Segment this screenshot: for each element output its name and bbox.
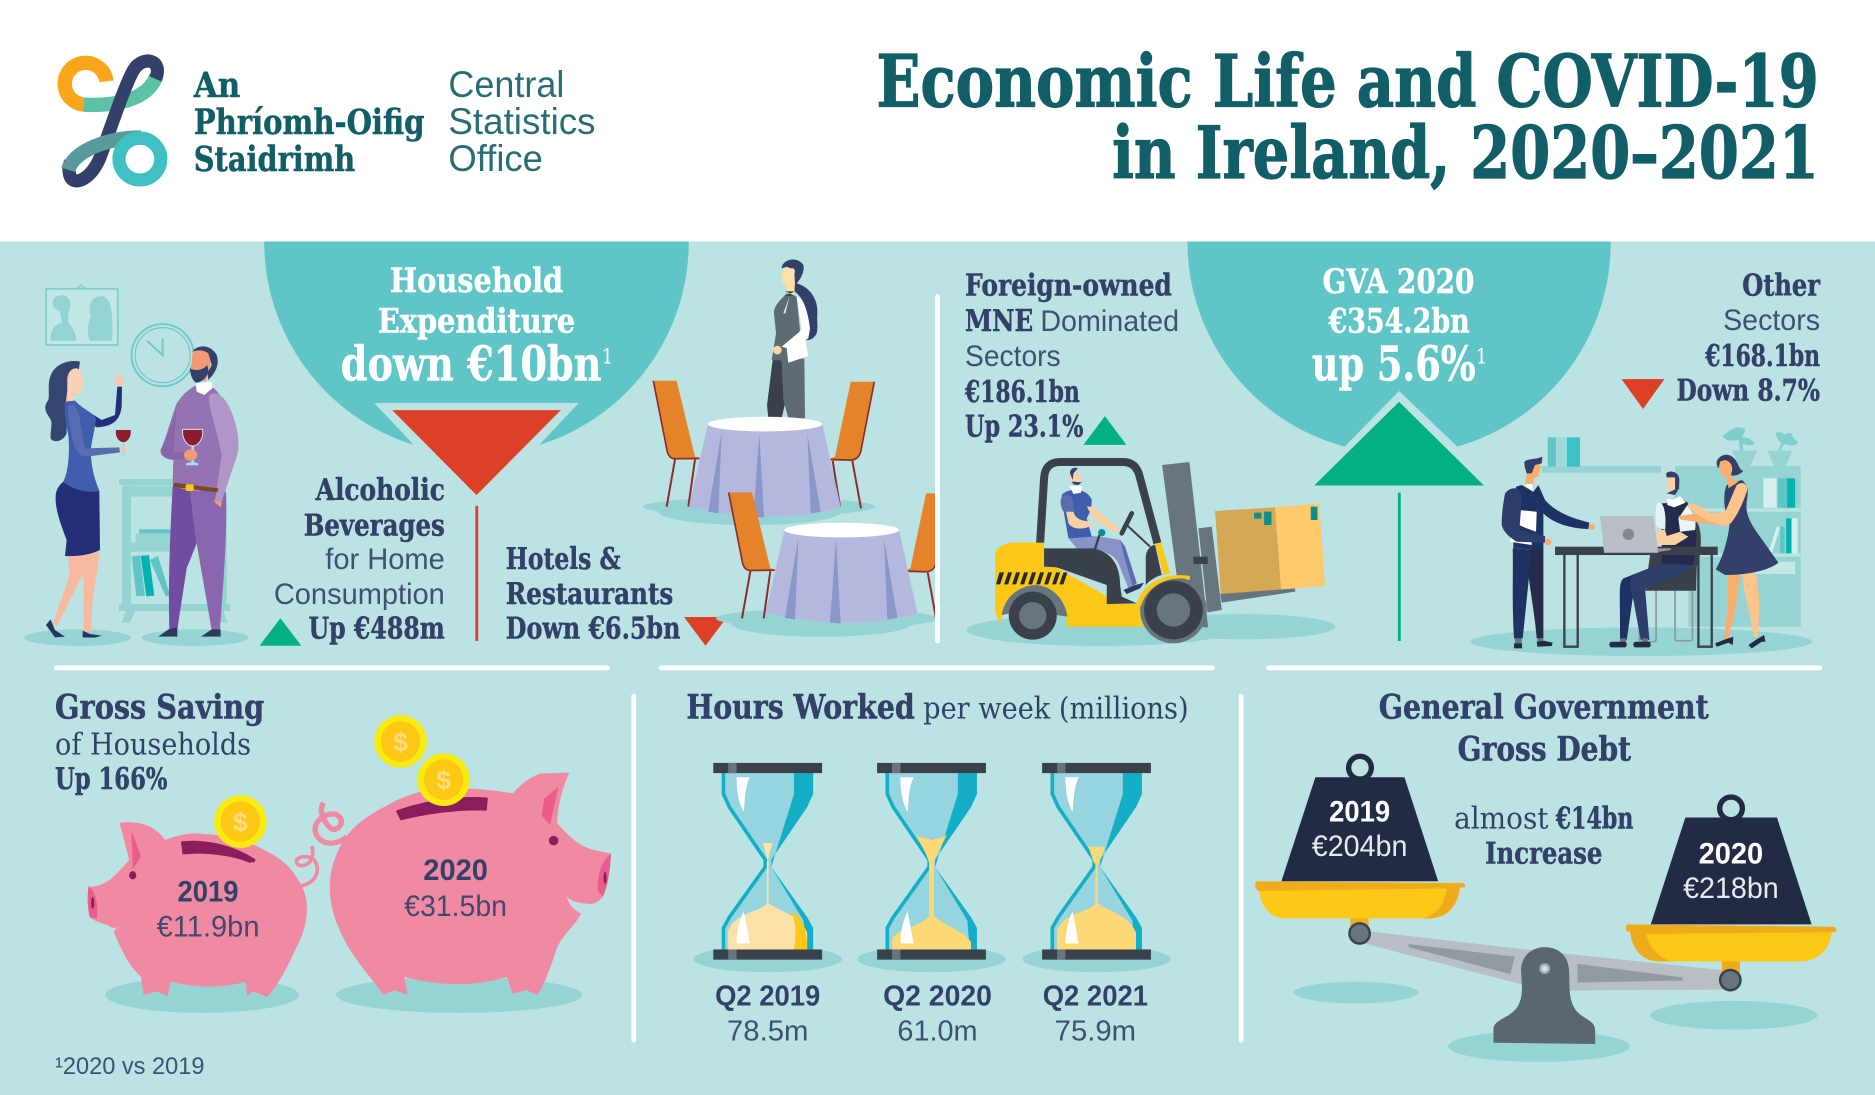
page background band <box>0 242 1875 1095</box>
hourglass Q2 2019 <box>694 763 842 972</box>
increase callout <box>1454 802 1634 871</box>
headline: 1 <box>601 345 613 369</box>
hotels and restaurants text: Restaurants <box>506 577 673 612</box>
headline: Household <box>390 261 563 300</box>
piggy bank 2019 label <box>157 876 259 943</box>
funnel semicircle <box>264 242 689 445</box>
left pan and weight 2019: 2019 <box>1329 796 1390 829</box>
panel: household expenditure <box>259 242 727 647</box>
man <box>158 346 238 637</box>
increase callout: €14bn <box>1555 802 1634 837</box>
figures <box>24 346 248 646</box>
white divider lines <box>54 294 1822 1043</box>
headline <box>341 261 613 392</box>
cardboard box <box>1215 503 1325 594</box>
hotels and restaurants text: Hotels & <box>506 542 621 577</box>
right pan and weight 2020: 2020 <box>1699 837 1763 870</box>
CSO logo mark <box>65 61 161 181</box>
standing man <box>1502 457 1595 648</box>
header <box>65 39 1819 195</box>
panel: hours worked <box>686 688 1189 1047</box>
alcoholic beverages text <box>274 473 445 647</box>
other sectors text: Other <box>1742 268 1821 303</box>
table two chairs <box>729 492 950 620</box>
foreign-owned text: Sectors <box>965 340 1061 373</box>
wall clock <box>132 324 194 386</box>
shelves and shadow <box>1471 427 1812 656</box>
waitress <box>767 259 817 418</box>
panel: general government gross debt <box>1255 688 1836 1062</box>
title <box>877 39 1819 195</box>
increase callout: almost <box>1454 802 1549 837</box>
scale beam and stand <box>1360 930 1730 1044</box>
alcoholic beverages text: for Home <box>325 543 445 576</box>
foreign-owned text: Foreign-owned <box>965 268 1172 303</box>
green up triangle <box>1083 416 1126 445</box>
rear wheel <box>1009 592 1057 640</box>
hotels and restaurants text: Down €6.5bn <box>506 612 681 647</box>
other sectors text <box>1676 268 1821 409</box>
heading: per week (millions) <box>923 692 1189 727</box>
heading <box>686 688 1189 727</box>
hourglass labels: Q2 2019 <box>715 981 820 1013</box>
heading: Up 166% <box>55 762 167 797</box>
red down triangle <box>684 617 727 646</box>
alcoholic beverages text: Consumption <box>274 578 445 611</box>
piggy bank 2020 label: €31.5bn <box>404 890 507 923</box>
right pan and weight 2020 <box>1626 797 1836 990</box>
woman <box>45 361 131 638</box>
alcoholic beverages text: Up €488m <box>309 612 445 647</box>
other sectors text: Down 8.7% <box>1676 374 1820 409</box>
headline <box>1312 262 1488 392</box>
panel: gross value added <box>964 242 1821 641</box>
hourglass labels: Q2 2021 <box>1043 981 1148 1013</box>
desk and laptop <box>1555 516 1718 647</box>
headline: €354.2bn <box>1328 301 1470 340</box>
alcoholic beverages text: Beverages <box>304 509 445 544</box>
logo text: Irish name: Staidrimh <box>194 139 355 180</box>
piggy bank 2019: $ <box>233 807 248 837</box>
left pan and weight 2019 <box>1255 756 1465 944</box>
headline: GVA 2020 <box>1323 262 1474 301</box>
front wheel <box>1144 581 1203 639</box>
headline: down €10bn <box>341 336 601 392</box>
hourglass labels <box>715 981 1148 1047</box>
driver <box>1061 468 1150 594</box>
foreign-owned text: Dominated <box>1040 305 1179 338</box>
logo text: Irish name: An <box>193 65 240 106</box>
red down triangle <box>1621 379 1665 409</box>
red down arrow <box>392 410 561 641</box>
piggy bank 2020: $ <box>436 765 451 795</box>
green up triangle <box>259 618 301 646</box>
footnote: ¹2020 vs 2019 <box>55 1053 204 1080</box>
forklift body <box>995 543 1207 643</box>
heading <box>55 688 264 797</box>
hourglass labels: 61.0m <box>897 1015 978 1047</box>
piggy bank 2019 label: €11.9bn <box>157 910 259 943</box>
piggy bank 2020 label <box>404 854 507 923</box>
table two <box>766 523 917 623</box>
illustration: couple with wine <box>24 285 248 646</box>
foreign-owned text: €186.1bn <box>964 375 1080 410</box>
standing woman <box>1678 455 1778 648</box>
headline: Expenditure <box>378 301 575 340</box>
GVA semicircle <box>1187 242 1611 447</box>
piggy bank 2019 label: 2019 <box>178 876 239 909</box>
piggy bank 2019 <box>88 795 307 997</box>
other sectors text: Sectors <box>1723 304 1820 337</box>
hourglass labels: Q2 2020 <box>883 981 992 1013</box>
logo text: English name: Central <box>448 63 564 105</box>
pig tails <box>297 803 347 886</box>
floor shadows <box>24 629 248 646</box>
left pan and weight 2019: €204bn <box>1312 830 1407 863</box>
heading: Hours Worked <box>686 688 915 727</box>
seated man and chair <box>1609 471 1701 647</box>
hourglass Q2 2021 <box>1022 763 1171 972</box>
foreign-owned text: Up 23.1% <box>965 409 1083 444</box>
hourglass labels: 75.9m <box>1055 1015 1136 1047</box>
table one with chairs <box>653 381 874 517</box>
headline: up 5.6% <box>1312 336 1476 392</box>
pig shadows <box>105 977 582 1013</box>
scale shadows <box>1294 982 1818 1062</box>
right pan and weight 2020: €218bn <box>1683 872 1779 905</box>
shadows <box>967 614 1335 646</box>
panel: gross saving <box>55 688 611 1013</box>
logo text: Irish name <box>193 65 425 180</box>
alcoholic beverages text: Alcoholic <box>315 473 445 508</box>
mast and fork <box>1162 462 1295 627</box>
piggy bank 2020: $ <box>393 727 408 757</box>
logo text: English name: Office <box>448 137 543 179</box>
foreign-owned text: MNE <box>965 304 1033 339</box>
illustration: restaurant tables <box>643 259 950 637</box>
foreign-owned text <box>964 268 1179 444</box>
illustration: forklift <box>967 462 1335 646</box>
heading <box>1379 688 1709 769</box>
headline: 1 <box>1476 345 1488 369</box>
heading: Gross Debt <box>1458 730 1632 769</box>
bookshelf <box>119 478 230 623</box>
heading: General Government <box>1379 688 1709 727</box>
piggy bank 2020 <box>330 715 611 995</box>
increase callout: Increase <box>1485 836 1602 871</box>
logo text: Irish name: Phríomh-Oifig <box>194 102 425 143</box>
hotels and restaurants text <box>506 542 681 647</box>
piggy bank 2020 label: 2020 <box>423 854 488 887</box>
logo text: English name: Statistics <box>448 100 596 142</box>
hourglass Q2 2020 <box>857 763 1006 972</box>
heading: of Households <box>55 728 251 763</box>
logo text: English name <box>448 63 596 179</box>
picture frame <box>46 285 118 345</box>
table shadows <box>643 497 937 637</box>
heading: Gross Saving <box>55 688 264 727</box>
other sectors text: €168.1bn <box>1704 339 1820 374</box>
green up arrow <box>1314 402 1484 641</box>
illustration: office meeting <box>1471 427 1812 656</box>
forklift cage <box>1040 462 1157 543</box>
hourglass labels: 78.5m <box>727 1015 808 1047</box>
